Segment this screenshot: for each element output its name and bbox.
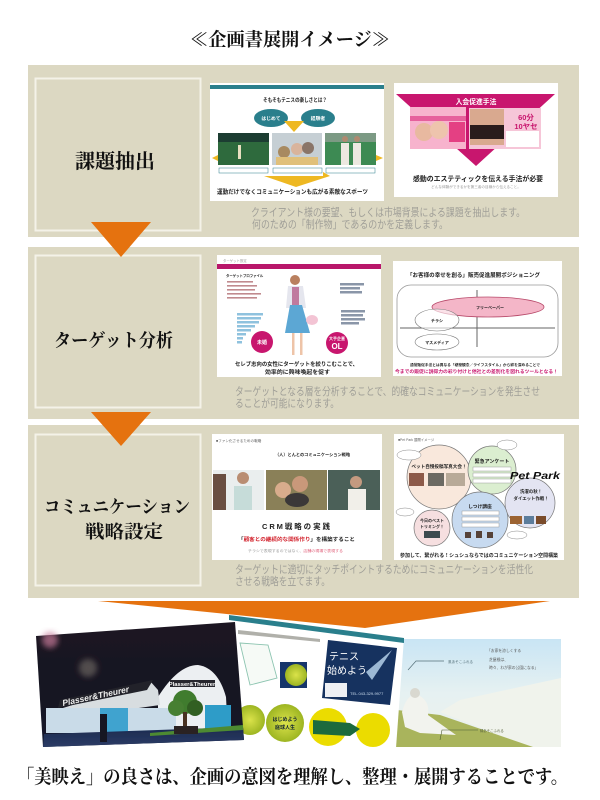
caption: 課題抽出: 何のための「制作物」であるのかを定義します。 (252, 217, 448, 231)
caption: ターゲット分析 (235, 384, 540, 410)
thumbnail: positioning slide: フリーペーパー (476, 304, 504, 310)
thumbnail: target profile slide: 未婚 (257, 339, 267, 346)
image: middle tennis sheet: テニス (329, 652, 359, 663)
caption: 課題抽出 (251, 205, 525, 231)
thumbnail: target profile slide: OL (331, 342, 343, 351)
label box: 課題抽出: 課題抽出 (75, 150, 155, 173)
caption: コミュニケーション戦略設定: ターゲットに適切にタッチポイントするためにコミュニケーションを活性化 (235, 562, 533, 576)
thumbnail: Pet Park slide: 今日のベスト (420, 517, 444, 523)
image: rooftop garden: 「お家を涼しくする (487, 648, 521, 653)
thumbnail: esthetic slide: 10ヤセ (514, 122, 538, 131)
thumbnail: esthetic slide: 60分 (518, 112, 534, 122)
image: rooftop garden: 風あそこふれる (448, 659, 474, 664)
panel: ターゲット分析 (28, 247, 579, 419)
thumbnail: Pet Park slide: ■Pet Park 展開イメージ (398, 437, 435, 442)
image: rooftop garden (393, 639, 561, 747)
arrow: step 1 to 2 (91, 222, 151, 257)
thumbnail: target profile slide (217, 255, 381, 377)
label box: コミュニケーション戦略設定 (36, 434, 200, 586)
thumbnail: target profile slide: 大手企業 (329, 335, 345, 341)
caption: コミュニケーション戦略設定: させる戦略を立てます。 (235, 574, 330, 588)
caption: ターゲット分析: ることが可能になります。 (235, 396, 339, 410)
thumbnail: esthetic slide (394, 83, 558, 197)
thumbnail: Pet Park slide: Pet Park (510, 471, 561, 482)
thumbnail: Pet Park slide: ダイエット作戦！ (513, 495, 549, 502)
thumbnail: tennis slide: 運動だけでなくコミュニケーションも広がる素敵なスポーツ (217, 188, 368, 196)
image: middle tennis sheet: 始めよう (327, 664, 367, 677)
label box: ターゲット分析: ターゲット分析 (54, 331, 173, 352)
panel: コミュニケーション戦略設定 (28, 425, 579, 598)
thumbnail: esthetic slide: 感動のエステティックを伝える手法が必要 (413, 174, 543, 183)
title: ≪企画書展開イメージ≫ (190, 29, 390, 51)
image: middle tennis sheet: 庭球人生 (275, 724, 295, 731)
image: middle tennis sheet: はじめよう (272, 716, 298, 723)
caption: コミュニケーション戦略設定 (235, 562, 533, 588)
label box: コミュニケーション戦略設定: コミュニケーション (44, 497, 190, 517)
thumbnail: target profile slide: ターゲットプロファイル (226, 273, 264, 278)
image: rooftop garden: 緑あそこふれる (480, 728, 504, 733)
thumbnail: positioning slide: 「お客様の幸せを創る」販売促進展開ポジショニング (407, 271, 540, 279)
thumbnail: positioning slide: チラシ (431, 317, 443, 323)
thumbnail: Pet Park slide: トリミング！ (420, 523, 444, 529)
thumbnail: Pet Park slide: しつけ講座 (468, 503, 492, 510)
thumbnail: CRM slide: CRM戦略の実践 (262, 521, 330, 531)
image: rooftop garden: 時々、わが家の公園になる」 (489, 665, 538, 670)
arrow: step 2 to 3 (91, 412, 151, 446)
caption: 課題抽出: クライアント様の要望、もしくは市場背景による課題を抽出します。 (251, 205, 525, 219)
image: middle tennis sheet (229, 615, 404, 748)
image: exhibition booth: Plasser&Theurer (169, 682, 216, 688)
thumbnail: Pet Park slide: 洗濯の秋！ (520, 488, 542, 495)
thumbnail: esthetic slide: どんな体験ができるかを第三者の目線から伝えること。 (431, 184, 521, 189)
thumbnail: Pet Park slide: 参加して、繋がれる！シュシュならではのコミュニケーション空間構築 (400, 552, 558, 559)
thumbnail: CRM slide (212, 434, 382, 560)
thumbnail: target profile slide: セレブ志向の女性にターゲットを絞りこむことで、 (235, 360, 358, 368)
thumbnail: CRM slide: ■ファン化させるための戦略 (216, 438, 262, 443)
thumbnail: esthetic slide: 入会促進手法 (456, 97, 497, 106)
label box: 課題抽出 (36, 78, 200, 230)
thumbnail: tennis slide: はじめて (261, 116, 281, 122)
image: exhibition booth (36, 622, 244, 747)
thumbnail: positioning slide: 通常販促手法とは異なる「棲築観念／ライフスタイル」から絆を深めることで (410, 362, 540, 367)
thumbnail: target profile slide: ターゲット設定 (223, 258, 247, 263)
thumbnail: target profile slide: 効率的に興味喚起を促す (265, 368, 330, 376)
thumbnail: positioning slide: マスメディア (425, 339, 449, 345)
thumbnail: Pet Park slide (394, 434, 564, 560)
image: middle tennis sheet: TEL.043-329-9977 (350, 691, 384, 696)
thumbnail: tennis slide: そもそもテニスの楽しさとは？ (263, 96, 327, 104)
thumbnail: CRM slide: 「顧客との継続的な関係作り 」を構築すること (238, 535, 355, 543)
label box: コミュニケーション戦略設定: 戦略設定 (85, 521, 163, 542)
label box: ターゲット分析 (36, 256, 200, 408)
thumbnail: Pet Park slide: ペット自慢投稿写真大会！ (411, 463, 467, 470)
thumbnail: CRM slide: チラシで表現するのではなく、 店舗の現場で表現する (248, 548, 343, 553)
thumbnail: positioning slide (393, 261, 562, 376)
thumbnail: CRM slide: （人）とんとのコミュニケーション戦略 (275, 451, 351, 458)
thumbnail: positioning slide: 今までの販促に説得力の彩り付けと他社との差別化を図れるツールとなる！ (395, 368, 558, 375)
image: rooftop garden: 芝屋根は、 (489, 657, 508, 662)
thumbnail: tennis slide (210, 83, 384, 201)
thumbnail: tennis slide: 経験者 (311, 115, 325, 122)
thumbnail: Pet Park slide: 緊急アンケート (475, 458, 509, 465)
panel: 課題抽出 (28, 65, 579, 237)
image: exhibition booth: Plasser&Theurer (61, 684, 131, 708)
arrow: wide arrow to results (98, 601, 550, 628)
